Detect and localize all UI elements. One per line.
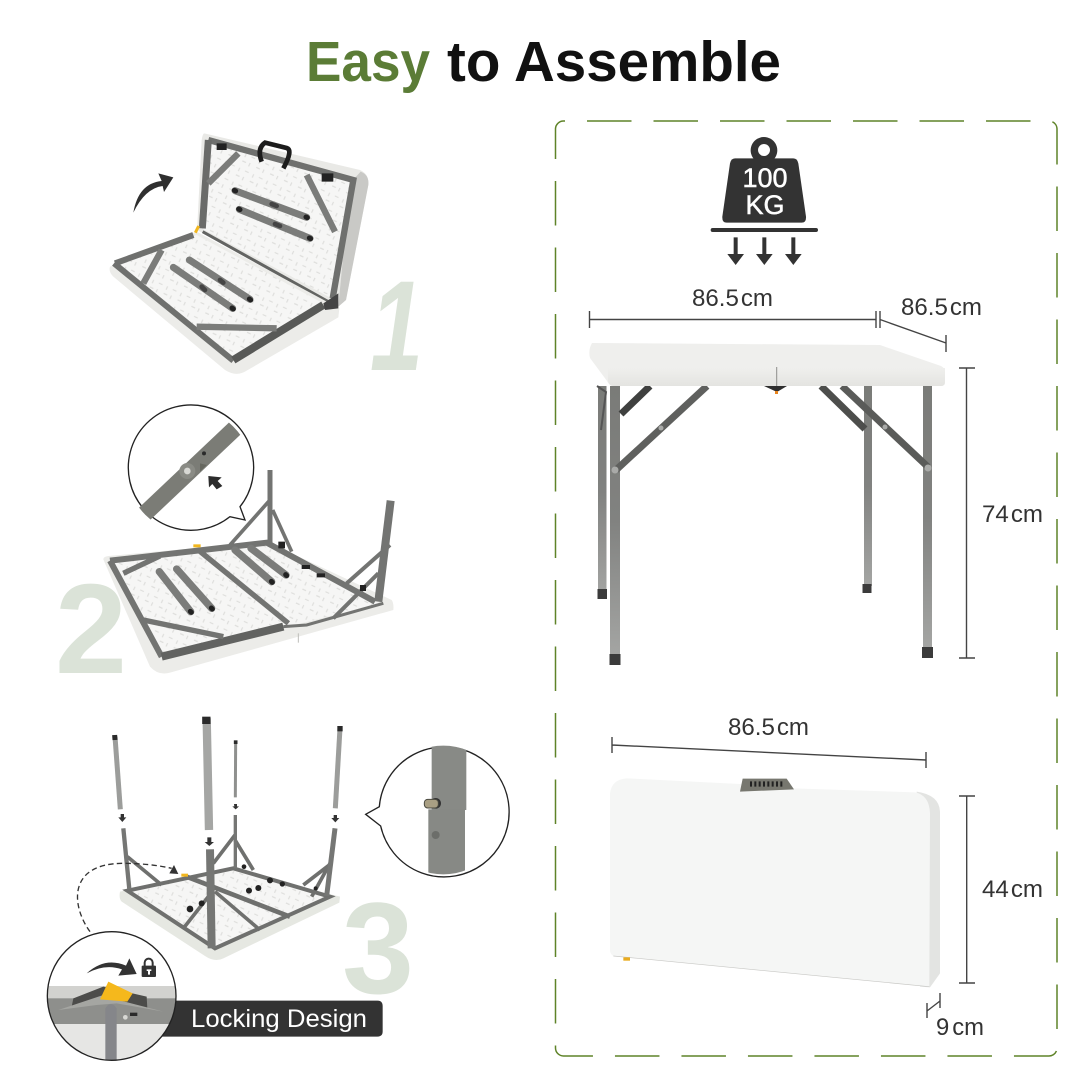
frame	[127, 835, 330, 948]
dimension: height 74cm: 74cm	[982, 501, 1043, 528]
step number 3: 3	[342, 875, 414, 1021]
yellow latch	[181, 874, 188, 877]
icon: curved arrow	[133, 173, 173, 213]
callout: pin detail	[366, 743, 509, 879]
callout: locking latch	[46, 931, 177, 1061]
table top	[103, 542, 393, 674]
dimension: folded width 86.5cm: 86.5cm	[728, 714, 809, 741]
center latch	[764, 386, 787, 392]
table top	[589, 343, 945, 386]
leg braces	[616, 386, 928, 470]
step number 1: 1	[370, 255, 423, 398]
stored legs	[159, 548, 287, 612]
frame	[110, 543, 383, 657]
callout: hinge detail	[128, 405, 254, 530]
yellow latch	[193, 544, 201, 547]
dimension: width 86.5cm: 86.5cm	[692, 285, 773, 312]
icon: pointer arrow	[208, 476, 222, 489]
locking design text: Locking Design	[191, 1005, 367, 1033]
panel: dimensions frame	[556, 121, 1057, 1056]
table legs	[115, 717, 340, 948]
step 1: opening folded table	[110, 133, 368, 374]
black brackets	[187, 864, 318, 912]
locking design label	[140, 1001, 383, 1037]
dimension: thickness 9cm: 9cm	[936, 1014, 984, 1041]
dimension: folded width 86.5cm	[612, 714, 926, 768]
lid panel	[197, 133, 368, 307]
lower panel	[110, 232, 339, 374]
dimension: thickness 9cm	[927, 993, 984, 1041]
yellow latch	[623, 957, 630, 961]
folded table photo	[610, 778, 940, 987]
dimension: folded height 44cm: 44cm	[982, 876, 1043, 903]
carry handle	[217, 143, 333, 182]
step 3: inserting legs	[40, 717, 509, 1064]
step 2: table with legs unfolding	[103, 405, 393, 674]
table legs	[598, 386, 933, 665]
title: Easy	[306, 30, 430, 94]
icon: 100 KG weight: KG	[745, 190, 785, 220]
dimension: folded height 44cm	[959, 796, 1043, 983]
carry handle	[740, 779, 794, 792]
dimension: depth 86.5cm	[880, 294, 982, 352]
stored legs on lower panel	[173, 260, 251, 309]
left hinge strap	[597, 386, 606, 430]
step number 2: 2	[55, 558, 127, 701]
yellow latch	[194, 225, 200, 233]
standing legs	[230, 470, 391, 618]
icon: padlock	[142, 959, 156, 977]
icons: down arrows	[118, 804, 339, 846]
title: to Assemble	[447, 30, 781, 94]
title	[306, 30, 781, 94]
black brackets	[278, 542, 366, 591]
table top	[120, 867, 340, 960]
icon: turning arrow	[87, 958, 137, 976]
stored legs on lid	[234, 190, 311, 239]
icon: 100 KG weight	[711, 137, 818, 265]
dimension: height 74cm	[959, 368, 1043, 658]
dimension: depth 86.5cm: 86.5cm	[901, 294, 982, 321]
open table photo	[589, 343, 945, 665]
dashed arrow to latch	[77, 863, 178, 932]
dimension: width 86.5cm	[590, 285, 876, 328]
icon: 100 KG weight: 100	[742, 163, 788, 193]
